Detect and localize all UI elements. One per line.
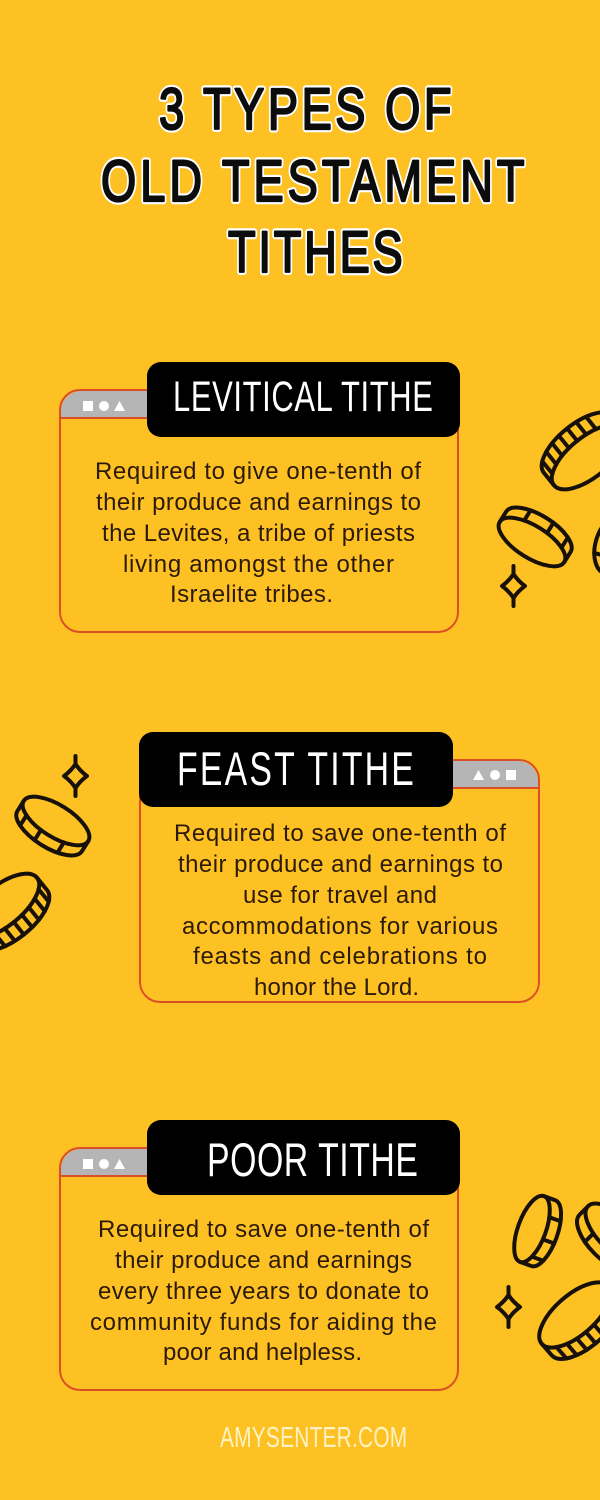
icon: coin small left — [9, 787, 97, 865]
text: levitical description: Israelite tribes. — [170, 581, 333, 608]
title: TITHES — [228, 221, 403, 285]
text: levitical description: living amongst the other — [123, 551, 394, 578]
text: feast description: accommodations for various — [182, 913, 498, 940]
footer: website: AMYSENTER.COM — [220, 1422, 407, 1454]
card outline — [60, 390, 458, 632]
icon: coin large lower right — [529, 1271, 600, 1370]
panel: levitical tithe — [60, 362, 460, 632]
heading: levitical tithe: LEVITICAL TITHE — [173, 372, 433, 420]
card outline — [140, 760, 539, 1002]
icon: sparkle left — [64, 756, 87, 796]
icon: coin upright — [507, 1191, 568, 1271]
title: 3 TYPES OF — [159, 78, 451, 142]
card outline — [60, 1148, 458, 1390]
window header bar — [440, 761, 538, 788]
text: poor description: community funds for aiding the — [90, 1309, 437, 1336]
title: TITHES — [228, 221, 403, 285]
text: poor description — [90, 1216, 437, 1366]
text: feast description: their produce and earnings to — [178, 851, 503, 878]
heading: feast tithe — [139, 732, 453, 807]
icon: coin large left — [0, 862, 60, 962]
title: OLD TESTAMENT — [101, 150, 525, 214]
text: levitical description: their produce and earnings to — [96, 489, 421, 516]
title — [101, 78, 525, 285]
window header bar — [61, 1149, 160, 1176]
icon: coin edge right — [588, 513, 600, 580]
heading: levitical tithe — [147, 362, 460, 437]
heading: feast tithe: FEAST TITHE — [177, 743, 414, 795]
title: OLD TESTAMENT — [101, 150, 525, 214]
icon: coin small right — [491, 498, 579, 576]
text: feast description: feasts and celebrations to — [193, 943, 487, 970]
icon: coin edge lower right — [568, 1194, 600, 1280]
text: levitical description: Required to give one-tenth of — [95, 458, 421, 485]
text: poor description: poor and helpless. — [163, 1339, 362, 1366]
window header bar — [61, 391, 160, 418]
icon: sparkle lower right — [497, 1287, 520, 1327]
title: 3 TYPES OF — [159, 78, 451, 142]
text: feast description: Required to save one-tenth of — [174, 820, 506, 847]
text: poor description: Required to save one-tenth of — [98, 1216, 429, 1243]
text: levitical description — [95, 458, 421, 608]
text: feast description — [174, 820, 506, 1001]
panel: poor tithe — [60, 1120, 460, 1390]
text: poor description: every three years to donate to — [98, 1278, 429, 1305]
heading: poor tithe — [147, 1120, 460, 1195]
panel: feast tithe — [139, 732, 539, 1002]
text: feast description: use for travel and — [243, 882, 437, 909]
text: poor description: their produce and earnings — [115, 1247, 412, 1274]
icon: coin large top right — [531, 401, 600, 501]
icon: sparkle right — [502, 566, 525, 606]
text: feast description: honor the Lord. — [254, 974, 419, 1001]
text: levitical description: the Levites, a tribe of priests — [102, 520, 415, 547]
heading: poor tithe: POOR TITHE — [207, 1134, 418, 1186]
